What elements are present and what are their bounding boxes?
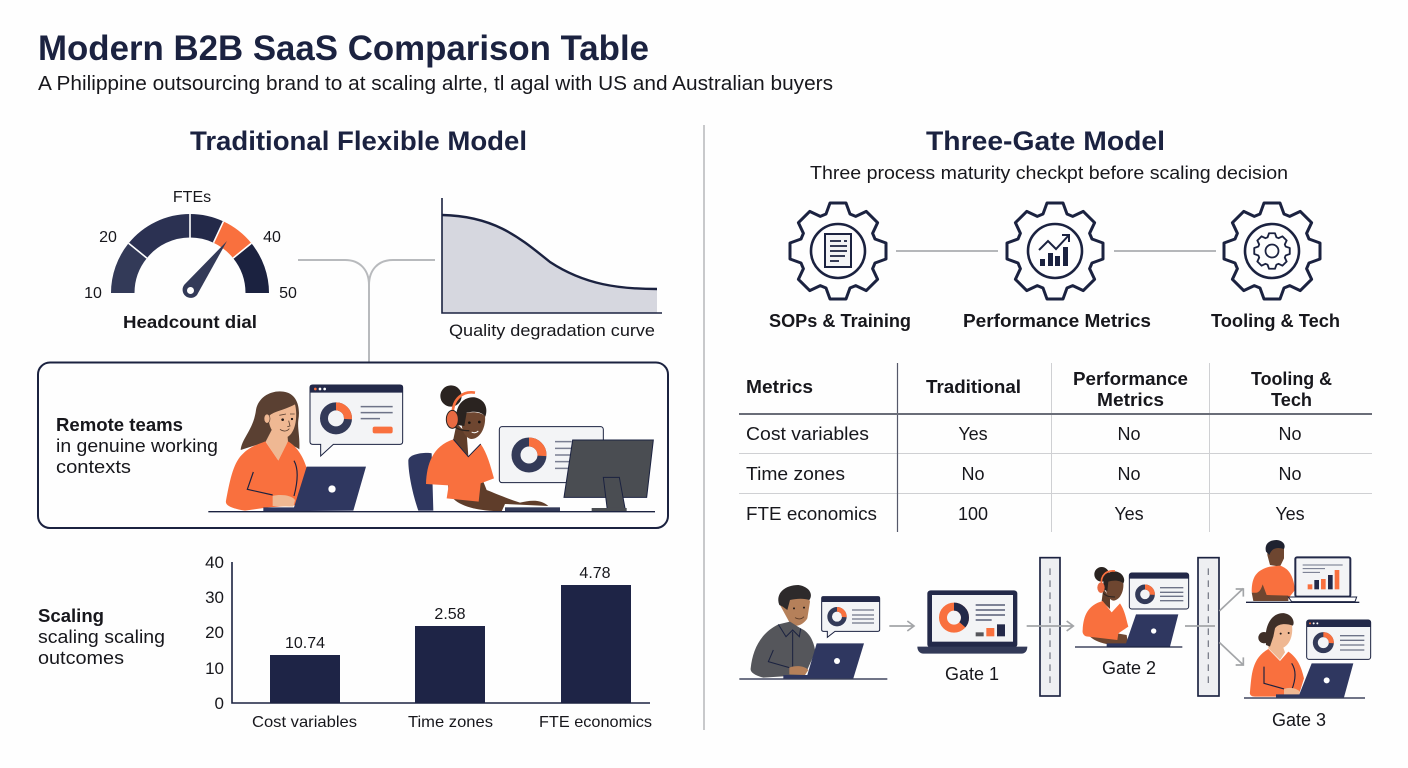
gate 3 dashboard xyxy=(1307,620,1371,659)
gate 1 laptop xyxy=(917,590,1027,654)
bar chart: scaling outcomes: 4.78 xyxy=(579,565,611,582)
barrier 2 xyxy=(1198,558,1219,696)
text: remote teams xyxy=(56,415,218,477)
comparison table: FTE economics xyxy=(746,504,877,524)
man with laptop xyxy=(739,585,887,679)
comparison table: Metrics xyxy=(1097,390,1164,410)
comparison table: Yes xyxy=(1114,504,1144,524)
bar chart: scaling outcomes: 2.58 xyxy=(434,606,466,623)
headcount dial gauge: FTEs xyxy=(173,189,211,206)
bar chart: scaling outcomes: Cost variables xyxy=(252,714,357,731)
bar chart: scaling outcomes: 40 xyxy=(205,553,224,572)
comparison table: No xyxy=(1117,464,1141,484)
quality degradation curve chart: Quality degradation curve xyxy=(449,321,655,340)
label: gate 3: Gate 3 xyxy=(1272,710,1326,730)
subheading: Three process maturity checkpt before scaling decision xyxy=(810,163,1288,183)
heading: traditional flexible model: Traditional Flexible Model xyxy=(190,126,527,156)
illustration: two remote workers xyxy=(208,385,655,512)
comparison table: 100 xyxy=(958,504,988,524)
panel: remote teams card xyxy=(38,362,668,528)
speech bubble dashboard xyxy=(310,385,403,456)
comparison table: No xyxy=(1117,424,1141,444)
bar chart: scaling outcomes xyxy=(205,553,652,731)
gear labels xyxy=(769,311,1340,331)
headcount dial gauge: 10 xyxy=(84,285,102,302)
headcount dial gauge: 20 xyxy=(99,229,117,246)
gate flow right: barriers, gate 2 and gate 3 workers xyxy=(1027,540,1371,698)
panel: three-gate model xyxy=(739,126,1372,730)
heading: three-gate model: Three-Gate Model xyxy=(926,126,1165,156)
icon: gear with chart xyxy=(1007,203,1103,299)
bar chart: scaling outcomes: 30 xyxy=(205,588,224,607)
speech bubble dashboard xyxy=(822,597,880,637)
text: remote teams: in genuine working xyxy=(56,436,218,456)
label: headcount dial: Headcount dial xyxy=(123,312,257,332)
comparison table: No xyxy=(1278,424,1302,444)
subtitle: A Philippine outsourcing brand to at scaling alrte, tl agal with US and Australian buyers xyxy=(38,73,833,95)
label: gate 1: Gate 1 xyxy=(945,664,999,684)
bar chart: scaling outcomes: 10 xyxy=(205,659,224,678)
panel: traditional flexible model xyxy=(38,126,668,731)
gate flow left: worker and gate 1 xyxy=(739,585,1027,679)
title: Modern B2B SaaS Comparison Table xyxy=(38,29,649,68)
connector lines xyxy=(298,260,435,362)
woman with headset at desktop xyxy=(408,385,653,511)
comparison table: Performance xyxy=(1073,369,1188,389)
headcount dial gauge: 40 xyxy=(263,229,281,246)
icon: gear with small gear xyxy=(1224,203,1320,299)
comparison table: Yes xyxy=(958,424,988,444)
bar chart: scaling outcomes: 10.74 xyxy=(285,635,325,652)
woman with laptop xyxy=(226,391,366,511)
barrier 1 xyxy=(1040,558,1060,696)
gate 3 bottom worker xyxy=(1244,613,1365,698)
quality degradation curve chart xyxy=(442,198,662,340)
gate connectors xyxy=(896,250,1216,252)
comparison table: Tooling & xyxy=(1251,369,1332,389)
gate 2 dashboard xyxy=(1129,573,1189,609)
arrow through barrier 1 xyxy=(1027,621,1073,631)
label: gate 2: Gate 2 xyxy=(1102,658,1156,678)
text: scaling outcomes: scaling scaling xyxy=(38,627,165,647)
gear labels: Performance Metrics xyxy=(963,311,1151,331)
headcount dial gauge: 50 xyxy=(279,285,297,302)
text: remote teams: contexts xyxy=(56,457,131,477)
bar chart: scaling outcomes: Time zones xyxy=(408,714,493,731)
comparison table: Cost variables xyxy=(746,424,869,444)
comparison table: Yes xyxy=(1275,504,1305,524)
arrows through barrier 2 xyxy=(1185,588,1243,665)
gear labels: SOPs & Training xyxy=(769,311,911,331)
comparison table xyxy=(739,363,1372,532)
gate 2 worker xyxy=(1075,567,1182,647)
gate 3 top worker xyxy=(1246,540,1359,602)
comparison table: No xyxy=(1278,464,1302,484)
bar chart: scaling outcomes: FTE economics xyxy=(539,714,652,731)
bar chart: scaling outcomes: 20 xyxy=(205,623,224,642)
comparison table: Time zones xyxy=(746,464,845,484)
comparison table: No xyxy=(961,464,985,484)
text: remote teams: Remote teams xyxy=(56,415,183,435)
text: scaling outcomes: Scaling xyxy=(38,606,104,626)
text: scaling outcomes: outcomes xyxy=(38,648,124,668)
comparison table: Traditional xyxy=(926,377,1021,397)
icon: gear with document xyxy=(790,203,886,299)
comparison table: Metrics xyxy=(746,377,813,397)
arrow xyxy=(889,621,914,631)
headcount dial gauge xyxy=(84,189,297,302)
gear labels: Tooling & Tech xyxy=(1211,311,1340,331)
text: scaling outcomes xyxy=(38,606,165,668)
comparison table: Tech xyxy=(1271,390,1312,410)
bar chart: scaling outcomes: 0 xyxy=(215,694,224,713)
